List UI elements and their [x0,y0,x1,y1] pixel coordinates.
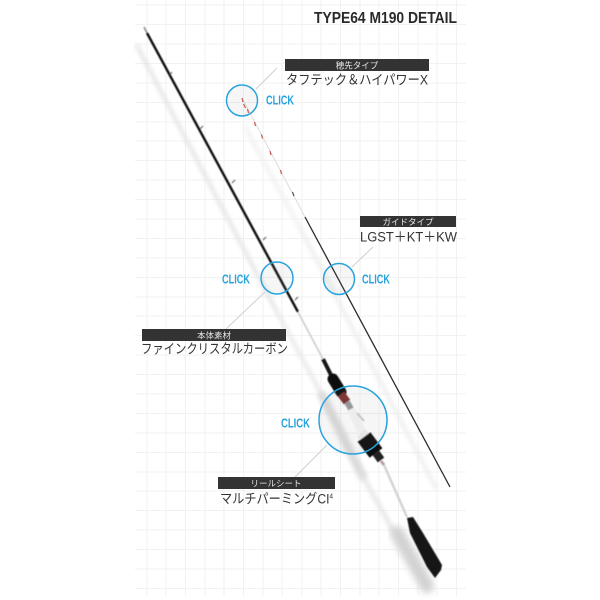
rod: butt section [144,27,407,517]
callout: body material [141,292,288,356]
callout: body material: ファインクリスタルカーボン [141,342,288,356]
callout: tip type: タフテック＆ハイパワーX [286,72,428,88]
grip shadow [397,533,427,586]
heading: TYPE64 M190 DETAIL [314,10,457,27]
hotspot: reel seat: CLICK [281,416,310,430]
rod shadows [137,46,436,532]
callout: reel seat: マルチパーミングCI [220,492,342,506]
hotspot: tip [226,85,294,116]
callout: reel seat [218,445,335,506]
callout: guide type [352,216,457,267]
callout: guide type: LGST＋KT＋KW [360,230,457,244]
callout: reel seat: 4 [329,494,333,500]
hotspot: tip: CLICK [266,94,294,108]
hotspot: guide: CLICK [362,272,390,286]
callout: tip type [256,59,429,89]
hotspot: body: CLICK [222,272,250,286]
callout: guide type: ガイドタイプ [382,217,434,227]
callout: body material: 本体素材 [197,330,231,340]
hotspot: guide [324,264,390,294]
rod: tip section [242,98,450,487]
rod: handle grip [407,517,442,578]
callout: tip type: 穂先タイプ [336,60,379,70]
callout: reel seat: リールシート [250,478,302,488]
hotspot: body [222,262,293,294]
hotspot: reel seat [281,386,387,454]
